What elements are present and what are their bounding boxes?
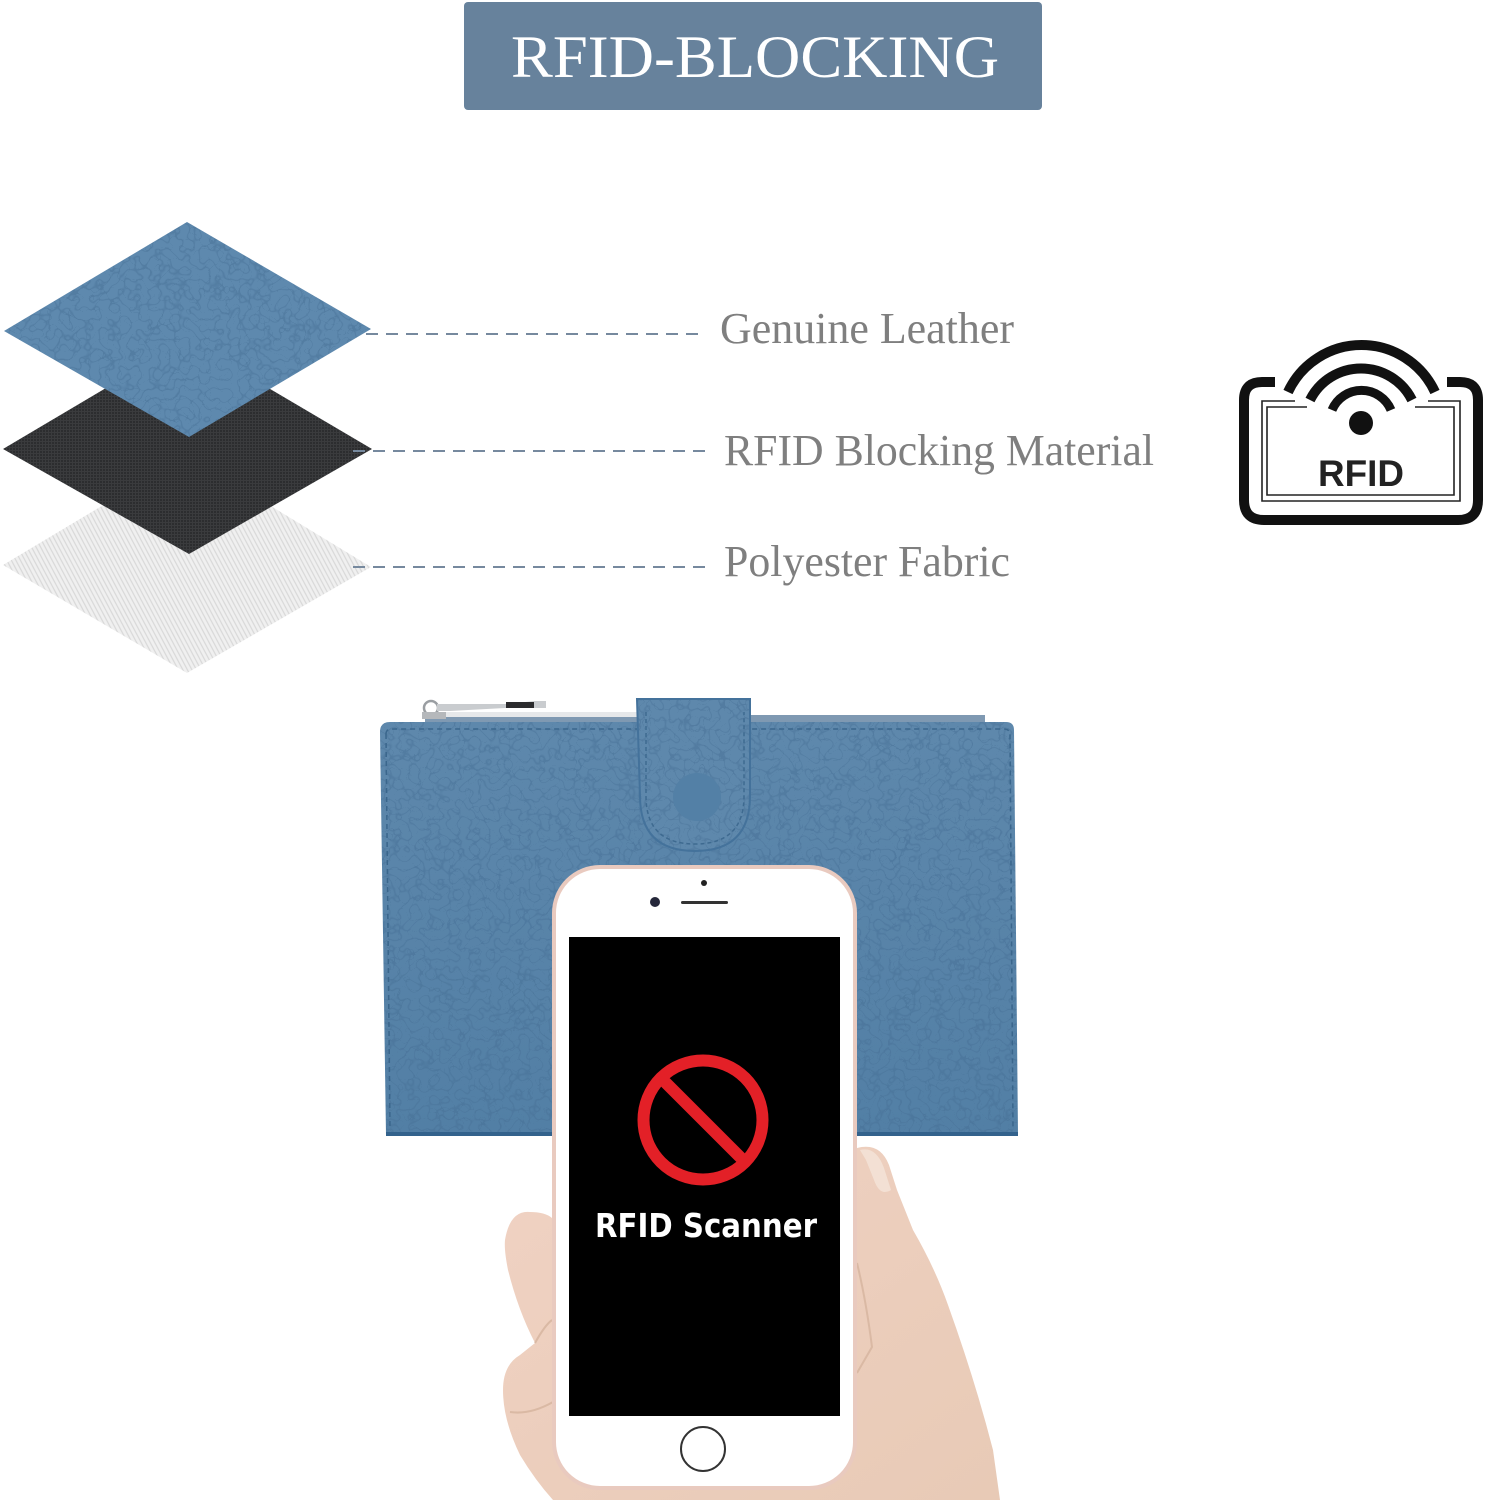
layer: RFID blocking material swatch [3,340,372,554]
screen label: RFID Scanner [595,1206,818,1245]
icon: prohibition sign [644,1060,762,1180]
wallet zipper [422,701,985,723]
layer: genuine leather swatch [4,222,371,437]
phone screen [569,937,840,1416]
leader line: RFID blocking material [345,450,705,452]
wallet bottom edge and stitching [386,729,1018,1134]
wallet strap and snap button [637,699,750,851]
wallet [380,699,1018,1135]
phone body [554,867,855,1488]
hand holding phone [503,1147,1000,1500]
label: genuine leather: Genuine Leather [720,304,1014,353]
wallet body [380,722,1018,1135]
layer: polyester fabric swatch [3,455,371,673]
title banner [464,2,1042,110]
phone home button [681,1427,725,1471]
leader line: polyester fabric [345,566,705,568]
icon: RFID badge: RFID [1318,453,1404,494]
label: polyester fabric: Polyester Fabric [724,537,1010,586]
phone camera and speaker [650,880,728,907]
icon: RFID badge [1244,345,1478,520]
label: RFID blocking material: RFID Blocking Material [724,426,1154,475]
phone [554,867,855,1488]
leader line: genuine leather [362,333,698,335]
title banner: RFID-BLOCKING [511,24,999,90]
